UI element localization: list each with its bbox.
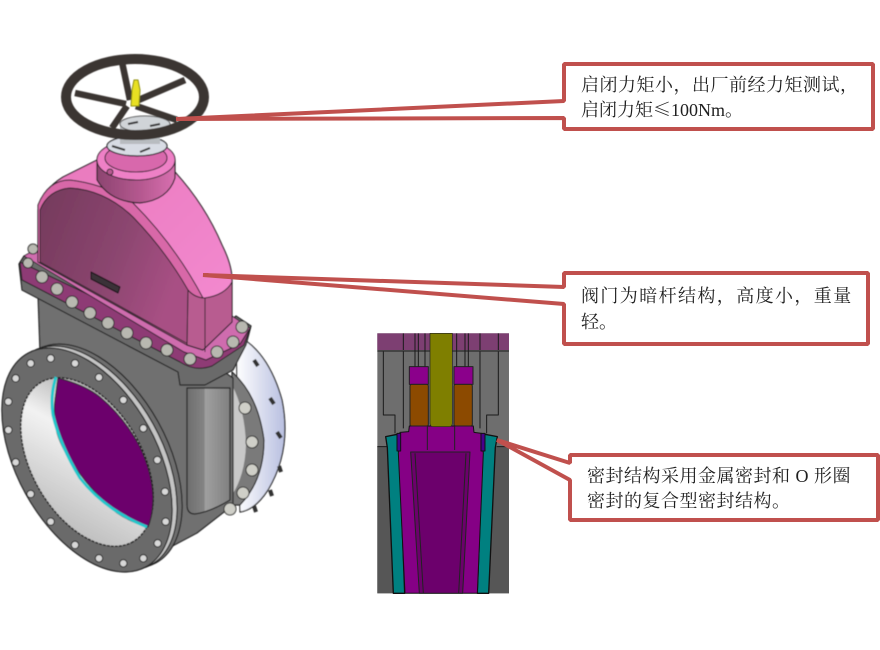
valve lower body — [38, 295, 233, 550]
bonnet nameplate — [91, 272, 120, 293]
body side column — [187, 388, 230, 514]
stem nut and gear hub — [107, 116, 170, 156]
callout: composite seal — [497, 440, 878, 520]
callout: concealed stem — [203, 273, 868, 344]
body bolts right side — [224, 402, 258, 515]
callout text: composite seal: 密封结构采用金属密封和 O 形圈 — [587, 466, 851, 486]
callout text: composite seal: 密封的复合型密封结构。 — [587, 491, 790, 511]
bonnet flange — [19, 248, 251, 385]
gate disc — [54, 378, 153, 527]
valve stem — [430, 333, 452, 427]
valve illustration — [0, 59, 285, 601]
front flange rims — [0, 315, 217, 599]
flange bolt holes — [5, 355, 169, 567]
bonnet flange bolts — [23, 244, 248, 365]
valve bore — [0, 355, 181, 569]
packing blocks — [409, 367, 473, 426]
callout: opening torque — [176, 64, 873, 129]
bonnet cover — [38, 160, 232, 352]
front flange — [0, 319, 207, 601]
callout text: concealed stem: 轻。 — [581, 312, 617, 332]
inner gate plate — [411, 452, 470, 593]
rear flange — [232, 335, 285, 512]
handwheel — [66, 59, 204, 135]
bonnet neck — [97, 140, 175, 203]
O-ring seals — [397, 433, 485, 451]
seal cross-section view — [377, 333, 509, 593]
teal seat rings — [386, 434, 497, 593]
callout text: opening torque: 启闭力矩≤100Nm。 — [581, 96, 743, 122]
callout text: concealed stem: 阀门为暗杆结构，高度小，重量 — [581, 286, 853, 306]
purple gate body — [398, 426, 483, 593]
callout text: opening torque: 启闭力矩小，出厂前经力矩测试， — [581, 75, 858, 95]
seal ring — [52, 377, 147, 527]
yellow stem tip — [131, 80, 140, 106]
